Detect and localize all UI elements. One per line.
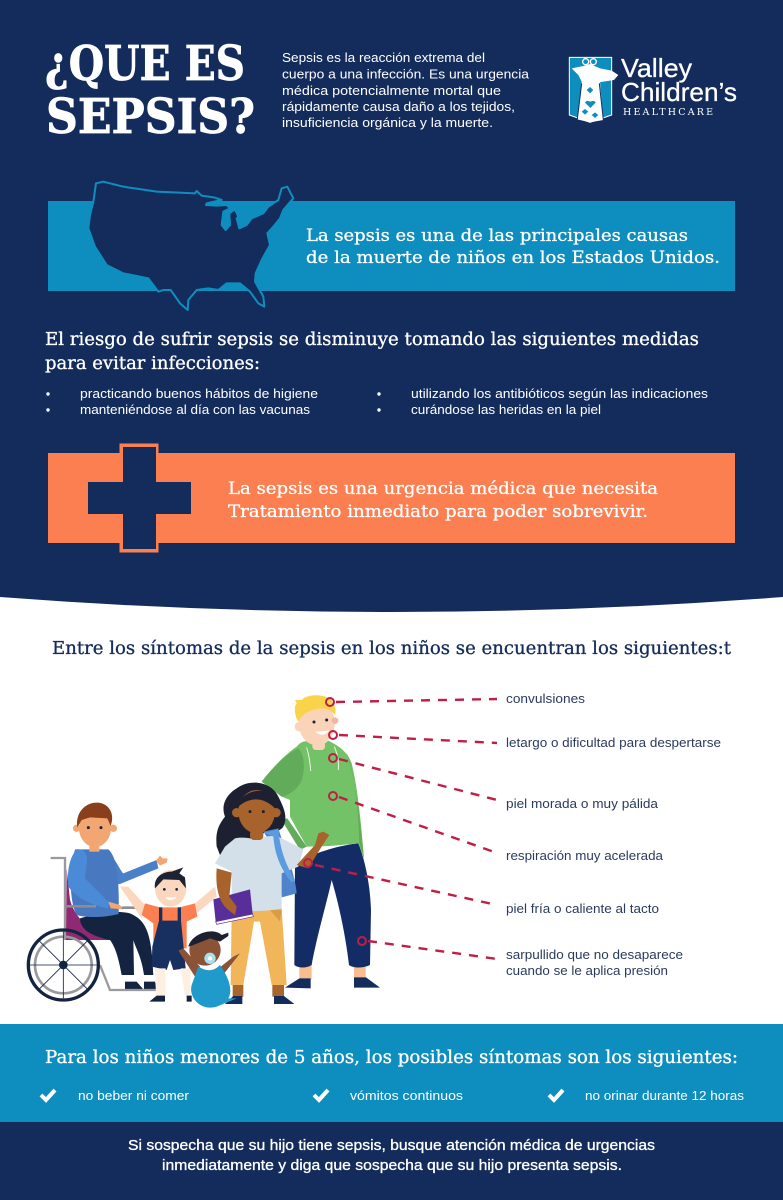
illustration: group of children [28,695,380,1008]
symptom list: no orinar durante 12 horas [585,1088,745,1103]
figure: girl with backpack [213,783,329,1004]
call to action text: inmediatamente y diga que sospecha que su hijo presenta sepsis. [162,1158,622,1174]
prevention bullet list: utilizando los antibióticos según las indicaciones [411,386,709,401]
heading: symptoms: Entre los síntomas de la sepsis en los niños se encuentran los siguientes:t [52,639,731,659]
symptom labels: convulsiones [506,691,586,706]
call to action text [128,1138,655,1174]
symptom list: vómitos continuos [350,1088,464,1103]
intro text: médica potencialmente mortal que [282,83,501,98]
icons: check marks [41,1090,563,1100]
figure: toddler boy [120,867,217,1002]
figure: boy in wheelchair [28,803,168,1000]
symptom pointers [304,698,497,959]
callout text: Tratamiento inmediato para poder sobrevivir. [228,502,648,522]
prevention bullet list [46,386,709,417]
logo wordmark: Valley [621,53,692,83]
heading: prevention: para evitar infecciones: [45,354,260,374]
icon: map of the United States [88,182,293,310]
logo tagline: HEALTHCARE [623,107,713,118]
callout text [228,479,658,522]
title [45,36,255,145]
callout text [306,226,720,268]
icon: medical cross [88,444,191,552]
title: SEPSIS? [46,89,255,145]
panel: call to action [0,1122,783,1200]
symptom labels: sarpullido que no desaparece [506,947,683,962]
intro text: rápidamente causa daño a los tejidos, [282,99,515,114]
panel: United States statistic [48,182,735,310]
callout text: La sepsis es una de las principales causas [306,226,688,246]
symptom labels: respiración muy acelerada [506,848,664,863]
symptom labels: letargo o dificultad para despertarse [506,735,721,750]
panel: medical emergency [48,444,735,552]
prevention bullet list: curándose las heridas en la piel [411,402,601,417]
callout text: de la muerte de niños en los Estados Unidos. [306,248,720,268]
logo wordmark [621,53,737,107]
logo: Valley Children's Healthcare [569,53,737,122]
figure: baby with pacifier [178,931,240,1008]
figure: tall boy [262,695,380,988]
intro text: cuerpo a una infección. Es una urgencia [282,66,530,82]
prevention bullet list: manteniéndose al día con las vacunas [80,402,311,417]
symptom list: no beber ni comer [78,1088,190,1103]
heading: prevention [45,330,699,374]
logo wordmark: Children’s [621,77,737,107]
title: ¿QUE ES [45,36,245,92]
panel: under five symptoms [0,1024,783,1122]
symptom labels: piel fría o caliente al tacto [506,901,659,916]
symptom list [78,1088,745,1103]
symptom labels: piel morada o muy pálida [506,796,659,811]
prevention bullet list: practicando buenos hábitos de higiene [80,386,318,401]
icon: giraffe shield [569,57,618,122]
call to action text: Si sospecha que su hijo tiene sepsis, busque atención médica de urgencias [128,1138,655,1154]
intro text [282,50,530,130]
heading: prevention: El riesgo de sufrir sepsis se disminuye tomando las siguientes medidas [45,330,699,350]
heading: Para los niños menores de 5 años, los posibles síntomas son los siguientes: [45,1048,738,1068]
wheelchair wheel [28,930,98,1000]
intro text: Sepsis es la reacción extrema del [282,50,485,65]
intro text: insuficiencia orgánica y la muerte. [282,115,493,130]
symptom labels: cuando se le aplica presión [506,963,668,978]
callout text: La sepsis es una urgencia médica que necesita [228,479,658,499]
symptom labels [506,691,721,978]
navy header background [0,0,783,612]
